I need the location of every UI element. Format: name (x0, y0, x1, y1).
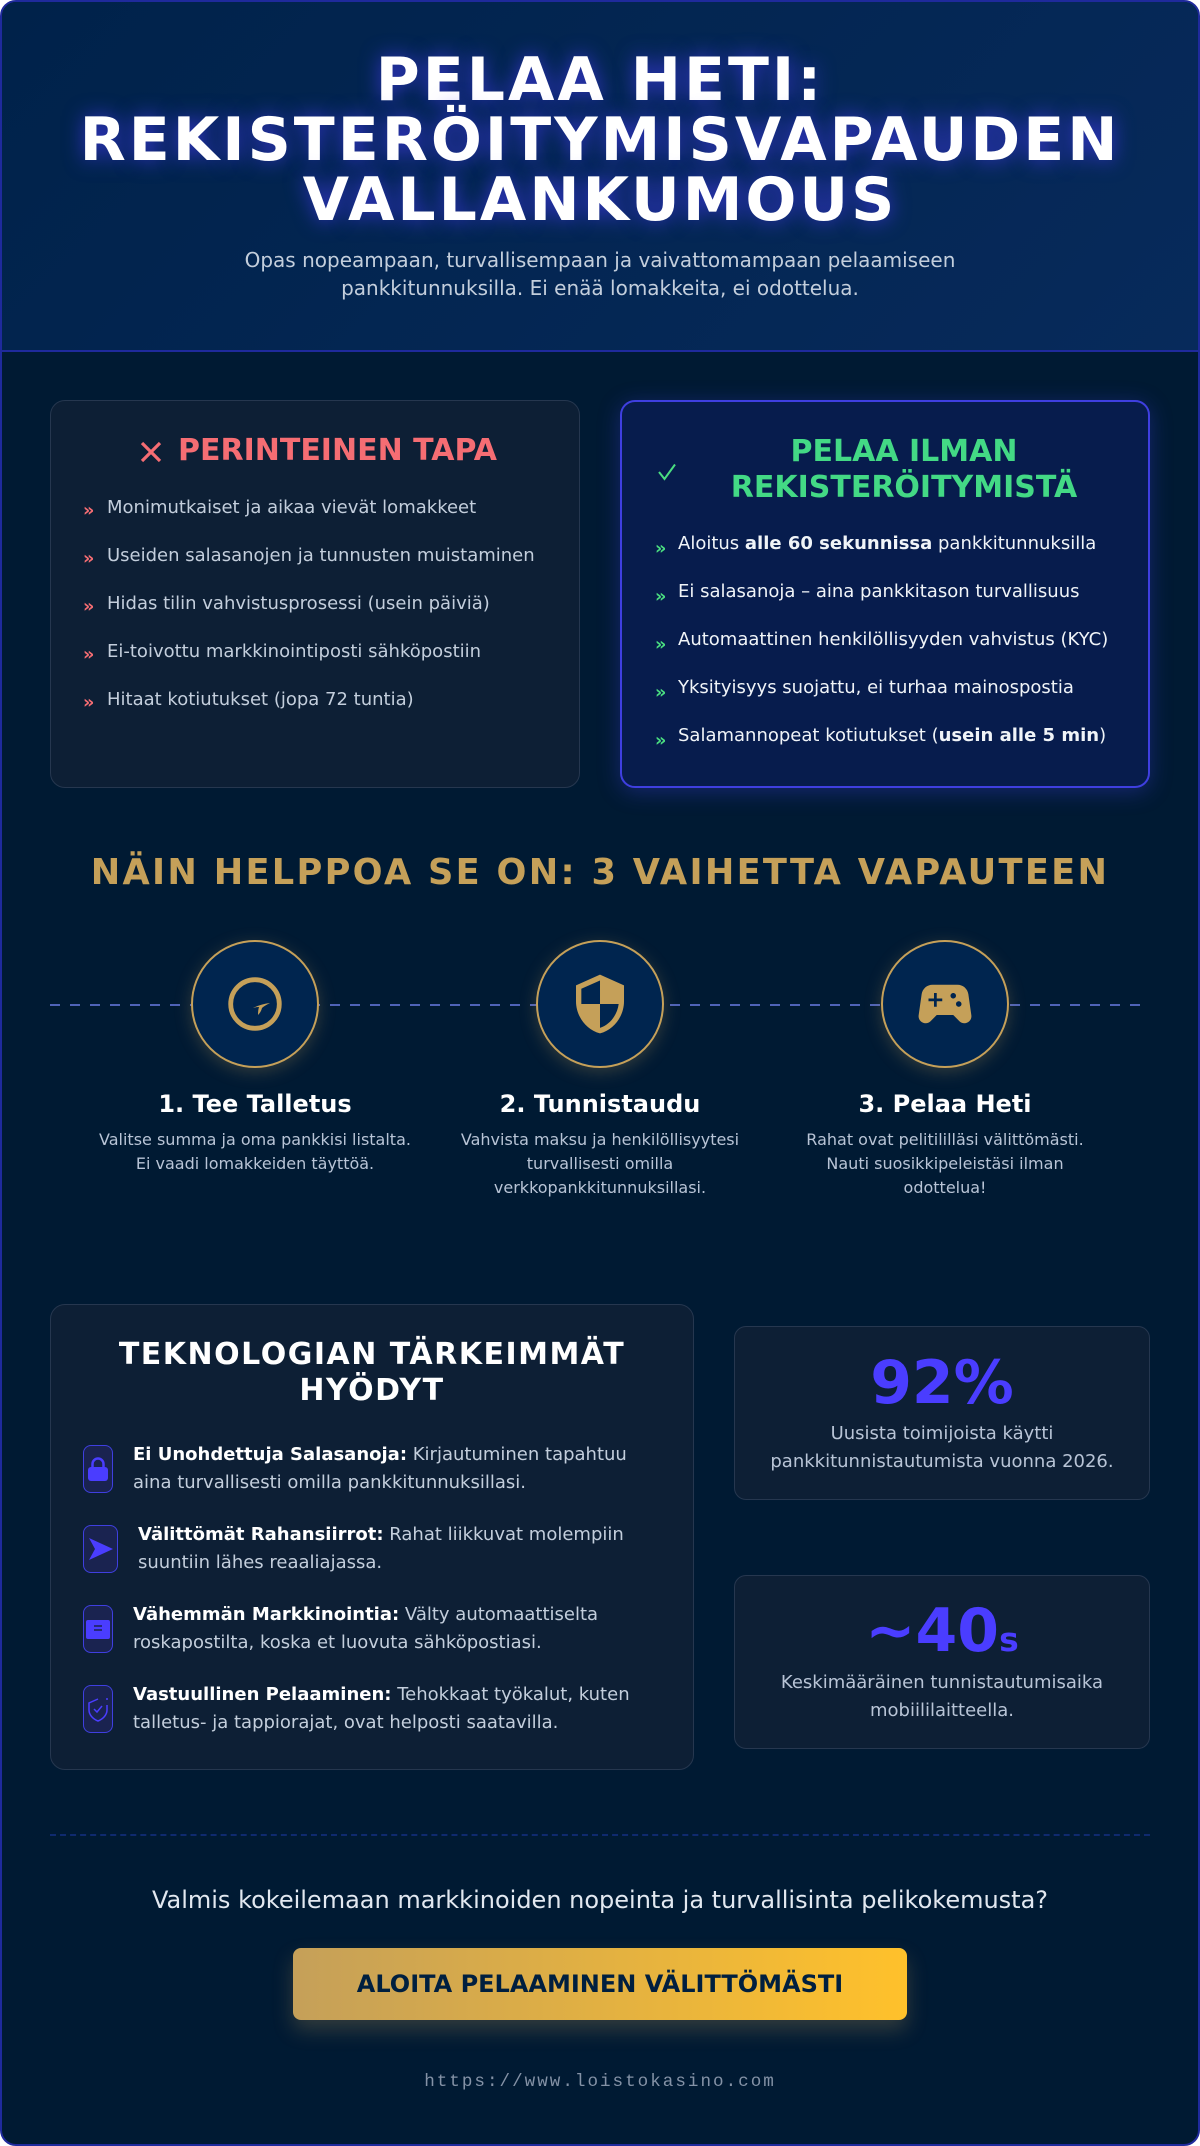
stat description (781, 1672, 1103, 1721)
icon: lock (83, 1445, 113, 1493)
list: drawbacks: Monimutkaiset ja aikaa vievät lomakkeet (107, 497, 476, 518)
list: drawbacks: » (83, 645, 94, 665)
benefit: no passwords (133, 1444, 627, 1493)
icon: message card (83, 1605, 113, 1653)
header banner (2, 2, 1198, 352)
heading: technology benefits (119, 1336, 625, 1408)
panel: technology benefits (50, 1304, 694, 1770)
benefit: responsible gaming (133, 1684, 630, 1733)
call to action button: ALOITA PELAAMINEN VÄLITTÖMÄSTI (357, 1970, 843, 1998)
benefit: instant transfers (138, 1524, 624, 1573)
benefit: instant transfers: Välittömät Rahansiirrot: Rahat liikkuvat molempiin (138, 1524, 624, 1545)
step 2 description: turvallisesti omilla (527, 1154, 673, 1173)
subtitle: pankkitunnuksilla. Ei enää lomakkeita, ei odottelua. (341, 276, 859, 300)
list: drawbacks: » (83, 597, 94, 617)
step 1 (99, 937, 411, 1173)
step 1 title: 1. Tee Talletus (158, 1090, 352, 1118)
list: benefits: » (655, 539, 666, 559)
step 3 description: Rahat ovat pelitililläsi välittömästi. (806, 1130, 1084, 1149)
list: benefits: Yksityisyys suojattu, ei turhaa mainospostia (678, 677, 1074, 698)
section heading: three steps: NÄIN HELPPOA SE ON: 3 VAIHETTA VAPAUTEEN (91, 852, 1109, 893)
stat description (770, 1423, 1114, 1472)
icon: game controller (874, 937, 1016, 1079)
list: drawbacks: Hidas tilin vahvistusprosessi (usein päiviä) (107, 593, 490, 614)
stat description: pankkitunnistautumista vuonna 2026. (770, 1451, 1114, 1472)
benefit: instant transfers: suuntiin lähes reaaliajassa. (138, 1552, 382, 1573)
call to action button (293, 1948, 907, 2020)
stat card: 92 percent (734, 1326, 1150, 1500)
step 2 description: Vahvista maksu ja henkilöllisyytesi (461, 1130, 739, 1149)
stat value: 92% (870, 1348, 1014, 1418)
step 3 description: Nauti suosikkipeleistäsi ilman (826, 1154, 1064, 1173)
heading: technology benefits: TEKNOLOGIAN TÄRKEIMMÄT (119, 1337, 625, 1372)
heading: play without registration (731, 434, 1077, 505)
subtitle (245, 248, 955, 300)
benefit: no passwords: Ei Unohdettuja Salasanoja: Kirjautuminen tapahtuu (133, 1444, 627, 1465)
footer divider (50, 1834, 1150, 1836)
call to action text: Valmis kokeilemaan markkinoiden nopeinta ja turvallisinta pelikokemusta? (152, 1886, 1048, 1914)
step 2 description (461, 1130, 739, 1197)
title (70, 43, 1126, 235)
step 2 description: verkkopankkitunnuksillasi. (494, 1178, 706, 1197)
step 1 description (99, 1130, 411, 1173)
list: drawbacks: Useiden salasanojen ja tunnusten muistaminen (107, 545, 535, 566)
benefit: responsible gaming: Vastuullinen Pelaaminen: Tehokkaat työkalut, kuten (133, 1684, 630, 1705)
panel: traditional way (50, 400, 580, 788)
stat description: Uusista toimijoista käytti (831, 1423, 1053, 1444)
icon: check mark (658, 464, 676, 480)
step 2 (461, 937, 739, 1197)
step 3 (806, 937, 1084, 1197)
list: drawbacks: Hitaat kotiutukset (jopa 72 tuntia) (107, 689, 414, 710)
heading: traditional way: PERINTEINEN TAPA (178, 433, 497, 468)
panel: play without registration (620, 400, 1150, 788)
list: drawbacks: » (83, 549, 94, 569)
icon: gauge circle (184, 937, 326, 1079)
list: benefits: » (655, 683, 666, 703)
benefit: less marketing: Vähemmän Markkinointia: Välty automaattiselta (133, 1604, 598, 1625)
stat description: mobiililaitteella. (870, 1700, 1014, 1721)
benefit: less marketing (133, 1604, 598, 1653)
footer url: https://www.loistokasino.com (424, 2072, 776, 2092)
step 3 title: 3. Pelaa Heti (858, 1090, 1032, 1118)
benefit: less marketing: roskapostilta, koska et luovuta sähköpostiasi. (133, 1632, 542, 1653)
benefit: no passwords: aina turvallisesti omilla pankkitunnuksillasi. (133, 1472, 526, 1493)
step 3 description (806, 1130, 1084, 1197)
list: drawbacks: » (83, 501, 94, 521)
benefit: responsible gaming: talletus- ja tappiorajat, ovat helposti saatavilla. (133, 1712, 558, 1733)
list: drawbacks: » (83, 693, 94, 713)
step 1 description: Valitse summa ja oma pankkisi listalta. (99, 1130, 411, 1149)
stat card: 40 seconds (734, 1575, 1150, 1749)
heading: play without registration: REKISTERÖITYMISTÄ (731, 470, 1077, 505)
title: VALLANKUMOUS (303, 165, 897, 235)
subtitle: Opas nopeampaan, turvallisempaan ja vaivattomampaan pelaamiseen (245, 248, 955, 272)
dashed step connector (50, 1004, 1140, 1006)
list: benefits: » (655, 587, 666, 607)
stat value: ~40s (865, 1596, 1019, 1666)
step 1 description: Ei vaadi lomakkeiden täyttöä. (136, 1154, 374, 1173)
step 3 description: odottelua! (904, 1178, 986, 1197)
list: drawbacks: Ei-toivottu markkinointiposti sähköpostiin (107, 641, 481, 662)
icon: paper plane (83, 1525, 118, 1573)
icon: cross (140, 442, 162, 462)
icon: shield (529, 937, 671, 1079)
step 2 title: 2. Tunnistaudu (500, 1090, 700, 1118)
icon: shield check (83, 1685, 113, 1733)
heading: play without registration: PELAA ILMAN (791, 434, 1017, 469)
list: benefits: Ei salasanoja – aina pankkitason turvallisuus (678, 581, 1079, 602)
list: benefits: » (655, 635, 666, 655)
title: PELAA HETI: (376, 45, 824, 115)
list: drawbacks (83, 497, 535, 713)
stat description: Keskimääräinen tunnistautumisaika (781, 1672, 1103, 1693)
list: benefits: Automaattinen henkilöllisyyden vahvistus (KYC) (678, 629, 1108, 650)
title: REKISTERÖITYMISVAPAUDEN (80, 105, 1120, 175)
heading: technology benefits: HYÖDYT (299, 1373, 445, 1408)
list: benefits: » (655, 731, 666, 751)
list: benefits: Salamannopeat kotiutukset (usein alle 5 min) (678, 725, 1106, 746)
list: benefits: Aloitus alle 60 sekunnissa pankkitunnuksilla (678, 533, 1096, 554)
list: benefits (655, 533, 1108, 751)
